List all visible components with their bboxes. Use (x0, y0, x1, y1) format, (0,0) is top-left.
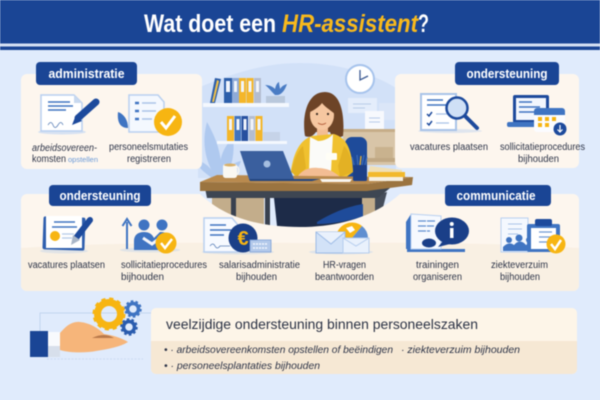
label: trainingen organiseren (413, 260, 462, 283)
icon: hand holding gears (30, 300, 151, 359)
heading tab: ondersteuning (455, 62, 559, 85)
label: ziekteverzuim bijhouden: bijhouden (500, 272, 540, 283)
panel: ondersteuning and communicatie (21, 185, 579, 291)
panel background (395, 74, 579, 168)
label: vacatures plaatsen: vacatures plaatsen (410, 142, 488, 153)
icon: vacancy with magnifier (418, 94, 482, 133)
icon: notebook and pen (40, 216, 90, 254)
label: HR-vragen beantwoorden: HR-vragen (323, 260, 366, 271)
title (144, 10, 429, 38)
heading tab: ondersteuning (49, 185, 151, 206)
header banner (0, 0, 600, 50)
panel background (21, 194, 579, 291)
lower band (151, 341, 577, 374)
label: trainingen organiseren: organiseren (413, 272, 462, 283)
label: ziekteverzuim bijhouden (491, 260, 548, 283)
label: salarisadministratie bijhouden: salarisadministratie (219, 260, 300, 271)
icon: salary document with euro: € (237, 228, 249, 250)
heading tab: ondersteuning: ondersteuning (60, 189, 140, 203)
icon: laptop with calendar (507, 95, 566, 136)
office chair (345, 137, 367, 179)
cardigan sleeves (291, 146, 306, 177)
bullet list: • · arbeidsovereenkomsten opstellen of beëindigen (164, 344, 393, 356)
label: salarisadministratie bijhouden: bijhouden (236, 272, 277, 283)
label: trainingen organiseren: trainingen (416, 260, 459, 271)
title: HR-assistent (282, 10, 419, 38)
label: sollicitatieprocedures bijhouden: bijhouden (518, 154, 559, 165)
panel background (151, 308, 577, 374)
yellow gear (94, 300, 124, 328)
wall notes (348, 98, 395, 130)
scene backdrop (198, 63, 396, 178)
upper shelf with binders (203, 78, 289, 107)
hand (60, 322, 128, 352)
desk (200, 175, 413, 235)
label: arbeidsovereenkomsten opstellen (32, 143, 98, 165)
panel background (21, 74, 202, 169)
lower band (21, 243, 579, 291)
panel: ondersteuning top right (395, 62, 585, 168)
cardigan (291, 134, 353, 178)
label: sollicitatieprocedures bijhouden (121, 260, 207, 283)
frame lines (40, 313, 151, 331)
title: Wat doet een (144, 10, 276, 38)
back cabinet (343, 129, 396, 165)
heading tab: administratie (36, 62, 137, 85)
icon: people with check (120, 219, 180, 254)
shirt (309, 134, 333, 172)
label: HR-vragen beantwoorden (315, 260, 374, 283)
heading tab: communicatie (445, 185, 551, 206)
bullet list: · ziekteverzuim bijhouden (401, 344, 520, 356)
panel heading: veelzijdige ondersteuning binnen personeelszaken (166, 316, 478, 332)
wall clock (346, 65, 374, 93)
neck and face (317, 125, 328, 139)
label: sollicitatieprocedures bijhouden: sollicitatieprocedures (500, 142, 585, 153)
label: sollicitatieprocedures bijhouden: bijhouden (121, 272, 164, 283)
bullet list (164, 344, 520, 372)
bullet list: • · personeelsplantaties bijhouden (164, 360, 320, 372)
name tag (326, 153, 337, 160)
panel: administratie (21, 62, 202, 169)
hands (298, 168, 340, 177)
illustration: HR assistant at desk (196, 63, 413, 235)
pencil cup (352, 155, 367, 181)
coffee mug (223, 164, 239, 178)
icon: personnel changes checklist (118, 95, 182, 136)
laptop (240, 151, 320, 181)
heading tab: communicatie: communicatie (456, 189, 536, 203)
label: vacatures plaatsen: vacatures plaatsen (28, 260, 105, 271)
hair (304, 92, 343, 138)
label: ziekteverzuim bijhouden: ziekteverzuim (491, 260, 548, 271)
blue gear small (122, 320, 136, 334)
potted plant (265, 82, 287, 95)
label: personeelsmutaties registreren: personeelsmutaties (109, 142, 188, 153)
lower shelf with binders (217, 116, 287, 144)
label: arbeidsovereenkomsten opstellen: komsten (32, 154, 66, 165)
woman (291, 92, 353, 178)
heading tab: administratie: administratie (48, 67, 125, 81)
icon: salary document with euro (202, 218, 274, 254)
blue gear (126, 302, 140, 316)
label: personeelsmutaties registreren (109, 142, 188, 165)
stack of books (320, 166, 405, 182)
sleeve (30, 331, 48, 357)
icon: training document and info bubble (406, 214, 469, 252)
label: personeelsmutaties registreren: registreren (127, 154, 171, 165)
label: arbeidsovereenkomsten opstellen: opstellen (68, 155, 98, 164)
icon: envelopes and pie (309, 222, 373, 254)
chair seat (317, 204, 363, 224)
icon: absence clipboard (501, 218, 566, 254)
trousers (274, 198, 362, 228)
plant in background (196, 122, 241, 178)
title: ? (418, 10, 429, 38)
label: sollicitatieprocedures bijhouden (500, 142, 585, 165)
panel: veelzijdige ondersteuning (151, 308, 577, 374)
icon: contract and pen (38, 95, 96, 134)
label: HR-vragen beantwoorden: beantwoorden (315, 272, 374, 283)
heading tab: ondersteuning: ondersteuning (466, 67, 548, 81)
label: salarisadministratie bijhouden (219, 260, 300, 283)
label: sollicitatieprocedures bijhouden: sollicitatieprocedures (121, 260, 207, 271)
label: arbeidsovereenkomsten opstellen: arbeidsovereen- (32, 143, 98, 154)
